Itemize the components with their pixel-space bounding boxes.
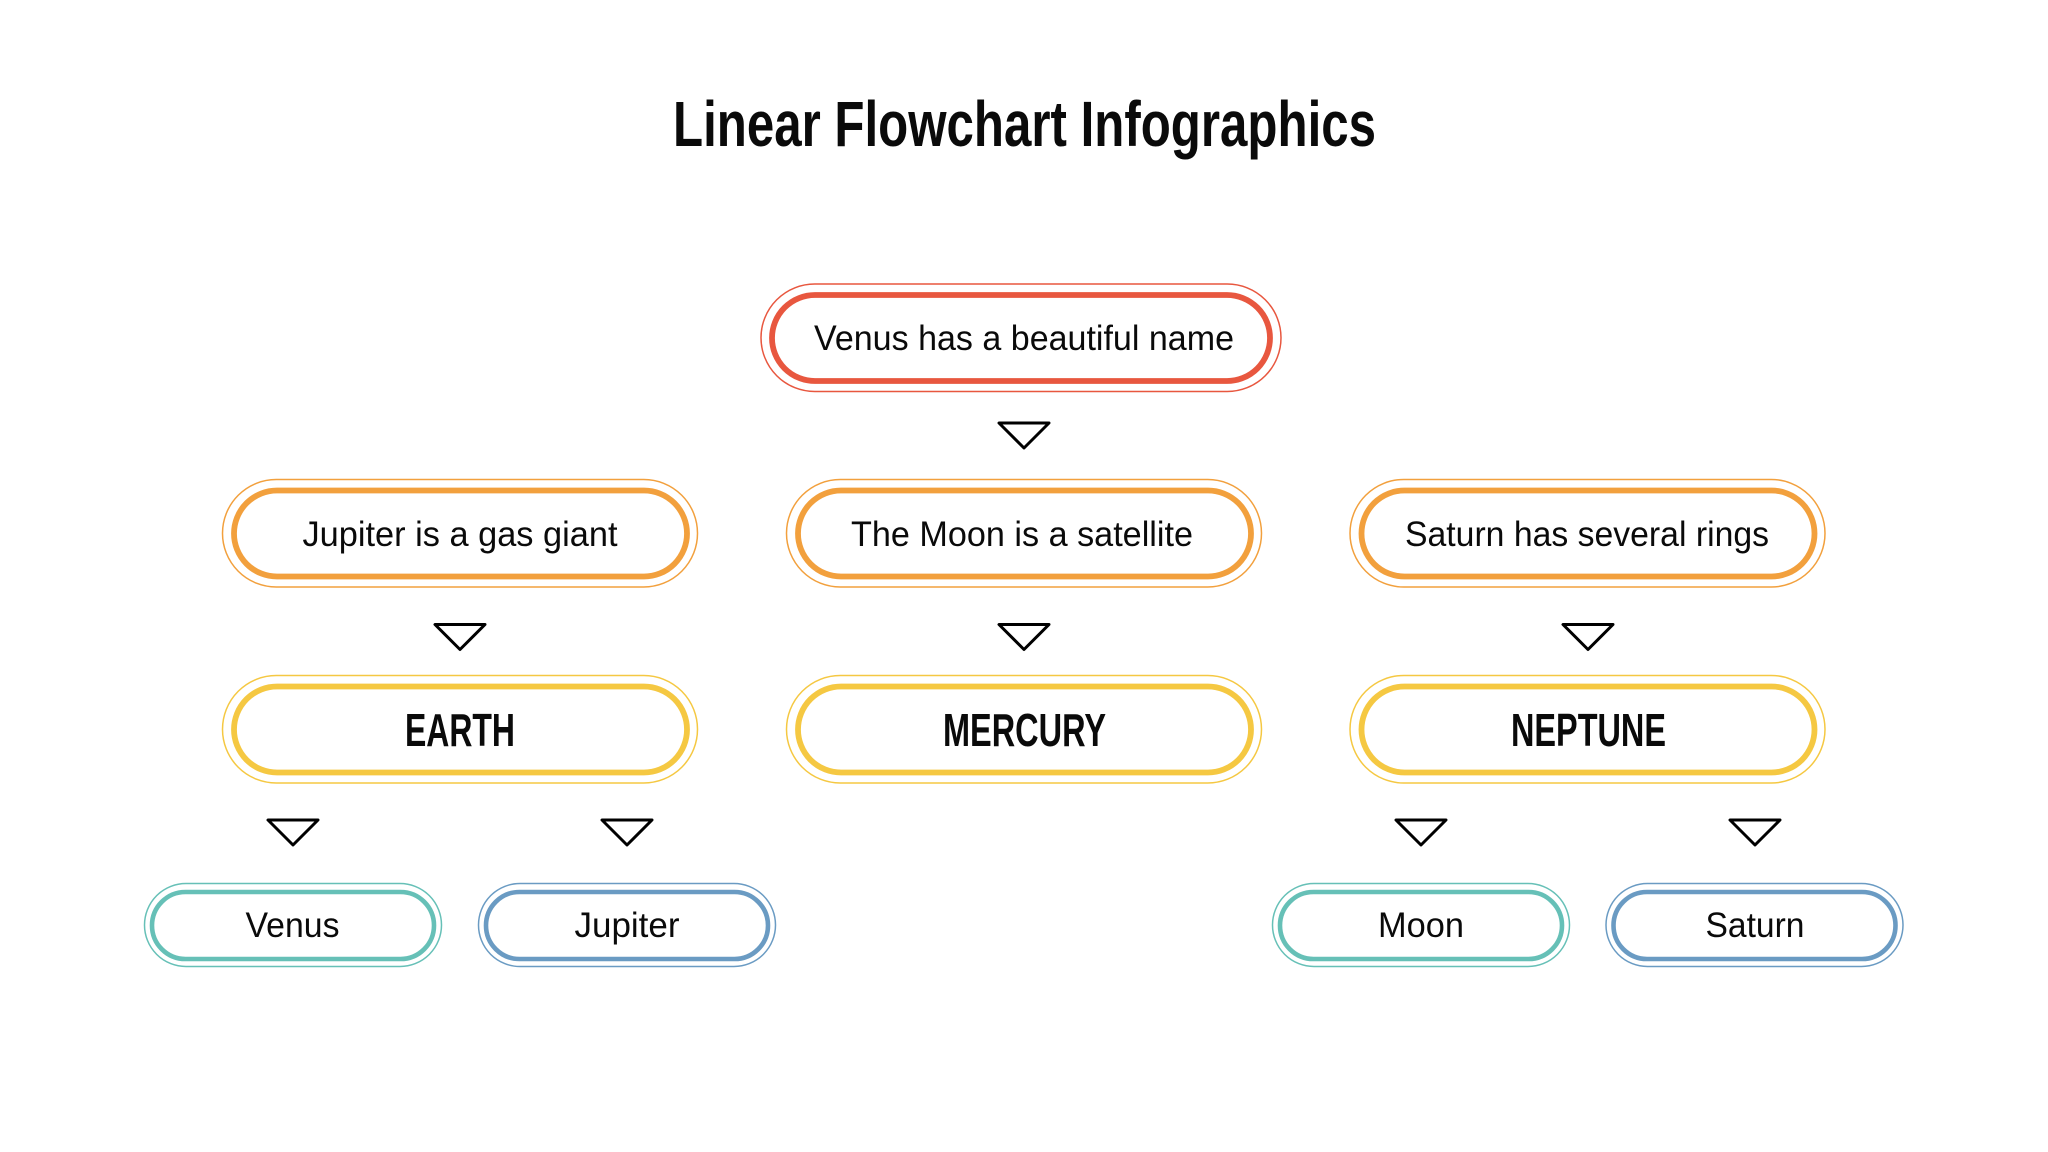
node: Saturn: Saturn xyxy=(1706,905,1804,945)
title: Linear Flowchart Infographics xyxy=(673,88,1376,160)
node: Jupiter is a gas giant: Jupiter is a gas giant xyxy=(302,514,618,554)
node: MERCURY: MERCURY xyxy=(943,704,1106,756)
node: Saturn has several rings xyxy=(1350,480,1825,587)
node: The Moon is a satellite: The Moon is a satellite xyxy=(851,514,1193,554)
node: NEPTUNE xyxy=(1350,676,1825,783)
arrow: Earth to Venus xyxy=(268,820,318,845)
node: Saturn has several rings: Saturn has several rings xyxy=(1405,514,1769,554)
arrow: Jupiter to Earth xyxy=(435,624,485,650)
node: Jupiter is a gas giant xyxy=(222,480,698,587)
node: Jupiter xyxy=(478,884,776,966)
arrow: top to middle xyxy=(999,423,1049,448)
arrow: Moon to Mercury xyxy=(999,624,1049,650)
node: Jupiter: Jupiter xyxy=(574,905,680,945)
node: EARTH: EARTH xyxy=(405,704,515,756)
node: Venus xyxy=(144,884,442,966)
node: Moon xyxy=(1272,884,1570,966)
node: Saturn xyxy=(1606,884,1903,966)
node: Moon: Moon xyxy=(1378,905,1464,945)
arrow: Saturn to Neptune xyxy=(1563,624,1613,650)
node: NEPTUNE: NEPTUNE xyxy=(1511,704,1666,756)
node: MERCURY xyxy=(786,676,1262,783)
node: Venus: Venus xyxy=(246,905,340,945)
node: The Moon is a satellite xyxy=(786,480,1262,587)
arrow: Neptune to Moon xyxy=(1396,820,1446,845)
node: Venus has a beautiful name: Venus has a beautiful name xyxy=(814,318,1234,358)
arrow: Neptune to Saturn xyxy=(1730,820,1780,845)
node: EARTH xyxy=(222,676,698,783)
arrow: Earth to Jupiter xyxy=(602,820,652,845)
node: Venus has a beautiful name xyxy=(761,284,1281,392)
